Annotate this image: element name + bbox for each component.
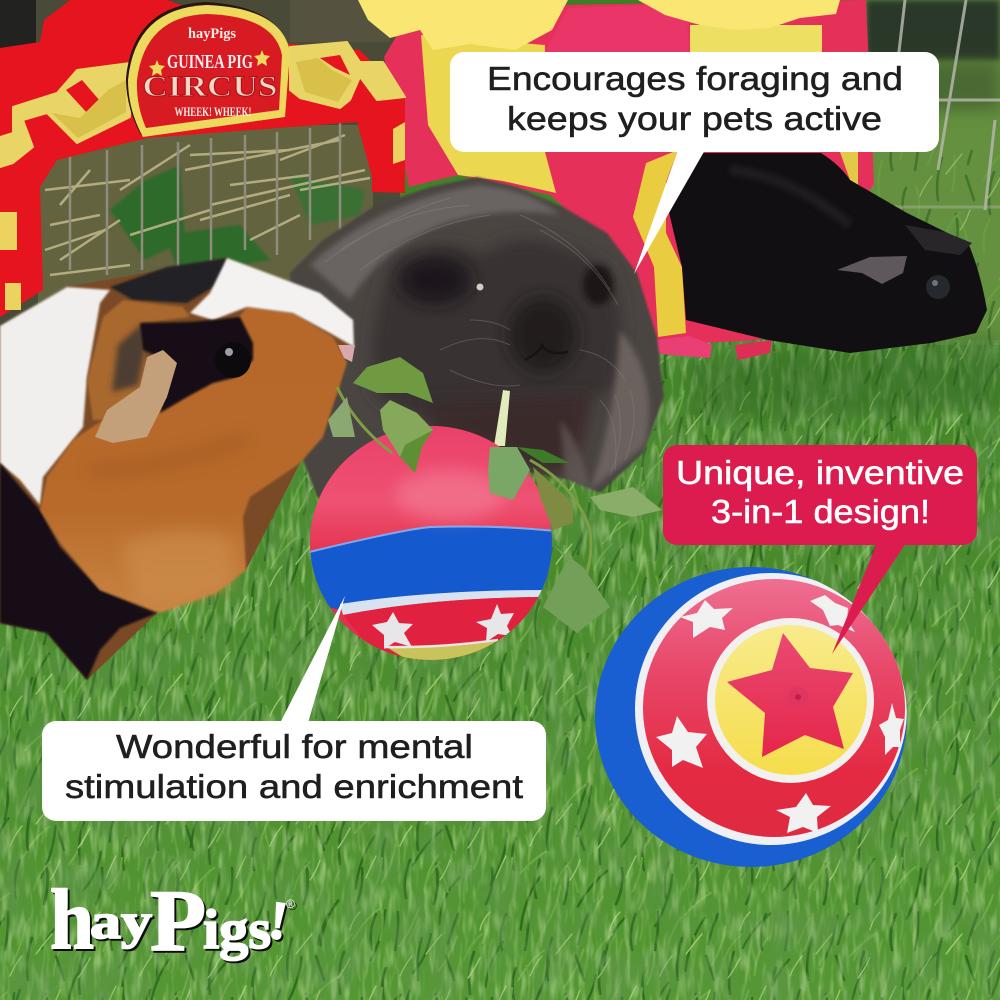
circus ball with stripes xyxy=(310,426,552,660)
gold scroll trim left xyxy=(0,63,130,167)
yellow left band xyxy=(421,35,556,193)
callout: mental stimulation xyxy=(42,596,546,821)
mouth xyxy=(525,345,568,360)
red face xyxy=(643,579,905,837)
white blaze xyxy=(190,258,354,347)
tricolour guinea pig xyxy=(0,258,355,680)
long fur at right xyxy=(590,330,649,490)
yellow disc xyxy=(715,625,867,775)
light fur on crown xyxy=(310,185,560,300)
logo: hayPigs!: h xyxy=(50,871,94,967)
white outer ring of yellow disc xyxy=(707,618,874,783)
gold scroll trim right xyxy=(290,42,405,108)
fleece feet xyxy=(654,336,712,358)
logo: hayPigs!: P xyxy=(150,873,206,970)
white stars xyxy=(656,595,904,833)
yellow leg stripes xyxy=(0,122,405,310)
reddish chin xyxy=(430,395,590,475)
yellow panel at top right xyxy=(690,25,822,55)
brown neck and chest xyxy=(40,307,347,613)
yellow flower fringe left xyxy=(358,0,568,50)
white ring edge xyxy=(635,573,907,845)
long haired brown guinea pig xyxy=(290,177,664,500)
circus sign medallion: hayPigs xyxy=(188,26,236,42)
yellow right band xyxy=(633,150,686,337)
callout: foraging: keeps your pets active xyxy=(507,100,882,137)
callout: unique design: Unique, inventive xyxy=(676,454,964,491)
logo: hayPigs!: ! xyxy=(265,889,291,951)
hay xyxy=(38,122,373,340)
circus sign medallion: GUINEA PIG xyxy=(167,51,253,73)
wire fence at right xyxy=(885,0,1000,210)
circus sign medallion xyxy=(126,2,290,137)
red arch frame xyxy=(0,0,405,317)
black saddle xyxy=(110,258,227,303)
nose xyxy=(338,345,355,362)
circus ball with star xyxy=(595,567,907,867)
circus sign medallion: CIRCUS xyxy=(142,70,278,103)
black guinea pig xyxy=(666,153,987,353)
lower white stripe xyxy=(340,590,542,615)
logo: hayPigs! xyxy=(50,871,295,970)
callout: foraging: Encourages foraging and xyxy=(487,60,903,97)
callout: foraging xyxy=(450,52,939,274)
eye xyxy=(215,342,251,378)
logo: hayPigs!: igs xyxy=(203,899,271,961)
fleece circus tent xyxy=(358,0,874,360)
callout: mental stimulation: Wonderful for mental xyxy=(116,728,473,765)
parsley leaves xyxy=(328,357,662,633)
black lower body xyxy=(0,463,157,680)
white back xyxy=(0,287,110,505)
base silhouette xyxy=(0,258,353,680)
callout: unique design xyxy=(663,445,977,654)
parsley stem in mouth xyxy=(494,390,510,446)
callout: mental stimulation: stimulation and enrichment xyxy=(65,768,523,805)
eye xyxy=(476,284,484,290)
yellow flower fringe right xyxy=(638,0,840,30)
ear xyxy=(95,350,177,443)
dark face xyxy=(372,239,621,426)
ear patch xyxy=(87,300,190,420)
fur strands xyxy=(325,198,634,475)
blue band xyxy=(300,527,560,610)
callout: unique design: 3-in-1 design! xyxy=(711,493,930,530)
logo: hayPigs!: ® xyxy=(286,897,295,911)
logo: hayPigs!: ay xyxy=(90,893,152,949)
lower red band xyxy=(343,597,540,665)
circus sign medallion: WHEEK! WHEEK! xyxy=(174,104,252,119)
central red star xyxy=(727,633,853,757)
black eye band xyxy=(140,317,253,413)
hay rack with arch xyxy=(0,0,405,340)
